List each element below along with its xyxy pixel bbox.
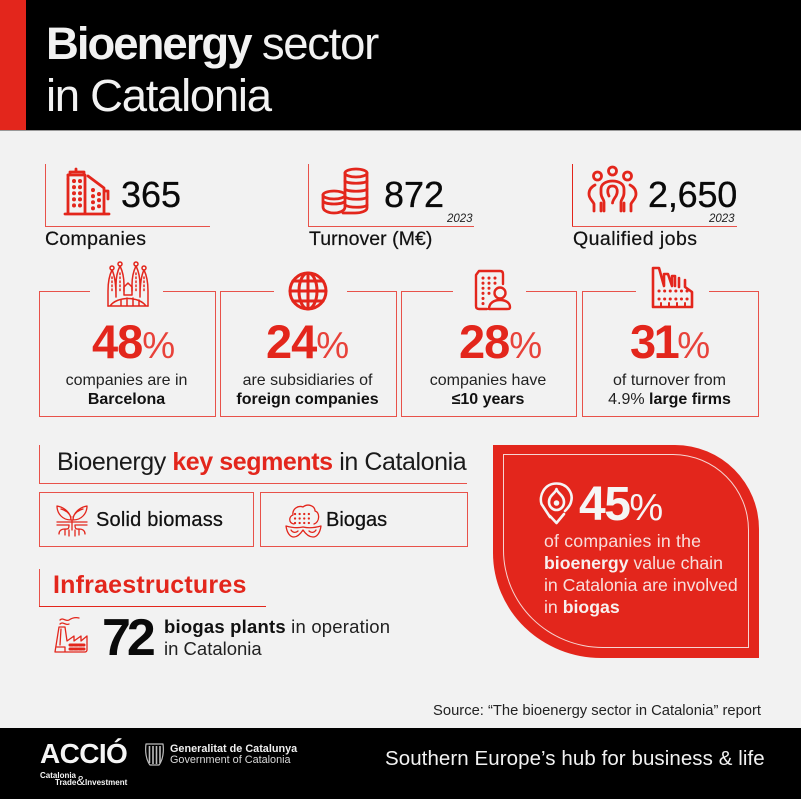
caption (608, 372, 731, 408)
title: in Catalonia (46, 70, 271, 121)
year note: 2023 (709, 213, 735, 225)
percentage: 31% (630, 315, 710, 368)
caption: ≤10 years (452, 391, 524, 408)
description: in biogas (544, 597, 620, 617)
segment: biogas (260, 492, 468, 547)
caption: 4.9% large firms (608, 391, 731, 408)
caption (236, 372, 379, 408)
card: subsidiaries (220, 291, 397, 417)
footer band (0, 728, 801, 799)
icon: sprout with roots (56, 505, 88, 537)
card: young companies (401, 291, 577, 417)
label: Qualified jobs (573, 228, 697, 250)
value: 365 (121, 174, 181, 215)
icon: office buildings (64, 168, 110, 216)
heading: key segments: Bioenergy key segments in Catalonia (57, 448, 466, 476)
description: of companies in the (544, 531, 701, 551)
inner outline (503, 454, 749, 648)
percentage: 24% (266, 315, 349, 368)
description: biogas plants in operation (164, 616, 390, 637)
percentage: 45% (579, 478, 663, 531)
description (164, 616, 390, 659)
logo: ACCIÓ (40, 738, 128, 788)
callout: 45% biogas (493, 445, 759, 658)
icon: map pin with flame (540, 482, 573, 524)
segment: solid biomass (39, 492, 254, 547)
caption: of turnover from (613, 372, 726, 389)
red accent block (0, 0, 26, 130)
value: 72 (102, 609, 152, 667)
infrastructure stat: biogas plants (54, 609, 390, 667)
description (544, 531, 738, 617)
stat: companies (45, 164, 210, 250)
caption: Barcelona (88, 391, 165, 408)
icon: Sagrada Familia (107, 261, 149, 307)
logo: ACCIÓ: ACCIÓ (40, 738, 127, 769)
label: Turnover (M€) (309, 228, 432, 250)
value: 2,650 (648, 174, 737, 215)
icon: coin stacks (322, 168, 368, 214)
description: in Catalonia (164, 638, 262, 659)
logo: Generalitat text: Government of Catalonia (170, 754, 291, 766)
title: Bioenergy sector (46, 18, 378, 69)
label: Biogas (326, 509, 387, 531)
logo: ACCIÓ: Catalonia (40, 771, 76, 780)
year note: 2023 (447, 213, 473, 225)
source note: Source: “The bioenergy sector in Catalonia” report (433, 703, 761, 719)
icon: team of people (588, 166, 638, 212)
icon: biogas plant (54, 617, 88, 653)
stat: turnover (308, 164, 474, 250)
description: in Catalonia are involved (544, 575, 738, 595)
logo: ACCIÓ: Trade&Investment (55, 773, 127, 788)
heading: infrastructures: Infraestructures (53, 571, 247, 599)
description: bioenergy value chain (544, 553, 723, 573)
stat: qualified jobs (572, 164, 737, 250)
label: Companies (45, 228, 146, 250)
caption (66, 372, 187, 408)
icon: biogas cloud and plant (285, 504, 322, 538)
caption: foreign companies (236, 391, 379, 408)
caption (430, 372, 546, 408)
label: Solid biomass (96, 509, 223, 531)
value: 872 (384, 174, 444, 215)
caption: are subsidiaries of (243, 372, 372, 389)
logo: Generalitat text: Generalitat de Catalunya (170, 743, 297, 755)
icon: factory (652, 266, 694, 308)
header band (0, 0, 801, 131)
tagline: Southern Europe’s hub for business & life (385, 747, 765, 770)
percentage: 28% (459, 315, 542, 368)
caption: companies have (430, 372, 546, 389)
icon: building with person (474, 270, 512, 310)
caption: companies are in (66, 372, 187, 389)
card: Barcelona (39, 291, 216, 417)
card: large firms (582, 291, 759, 417)
percentage: 48% (92, 315, 175, 368)
icon: globe (288, 272, 328, 310)
logo: Generalitat shield (145, 743, 164, 766)
title (46, 18, 379, 121)
logo: Generalitat text (170, 743, 298, 766)
